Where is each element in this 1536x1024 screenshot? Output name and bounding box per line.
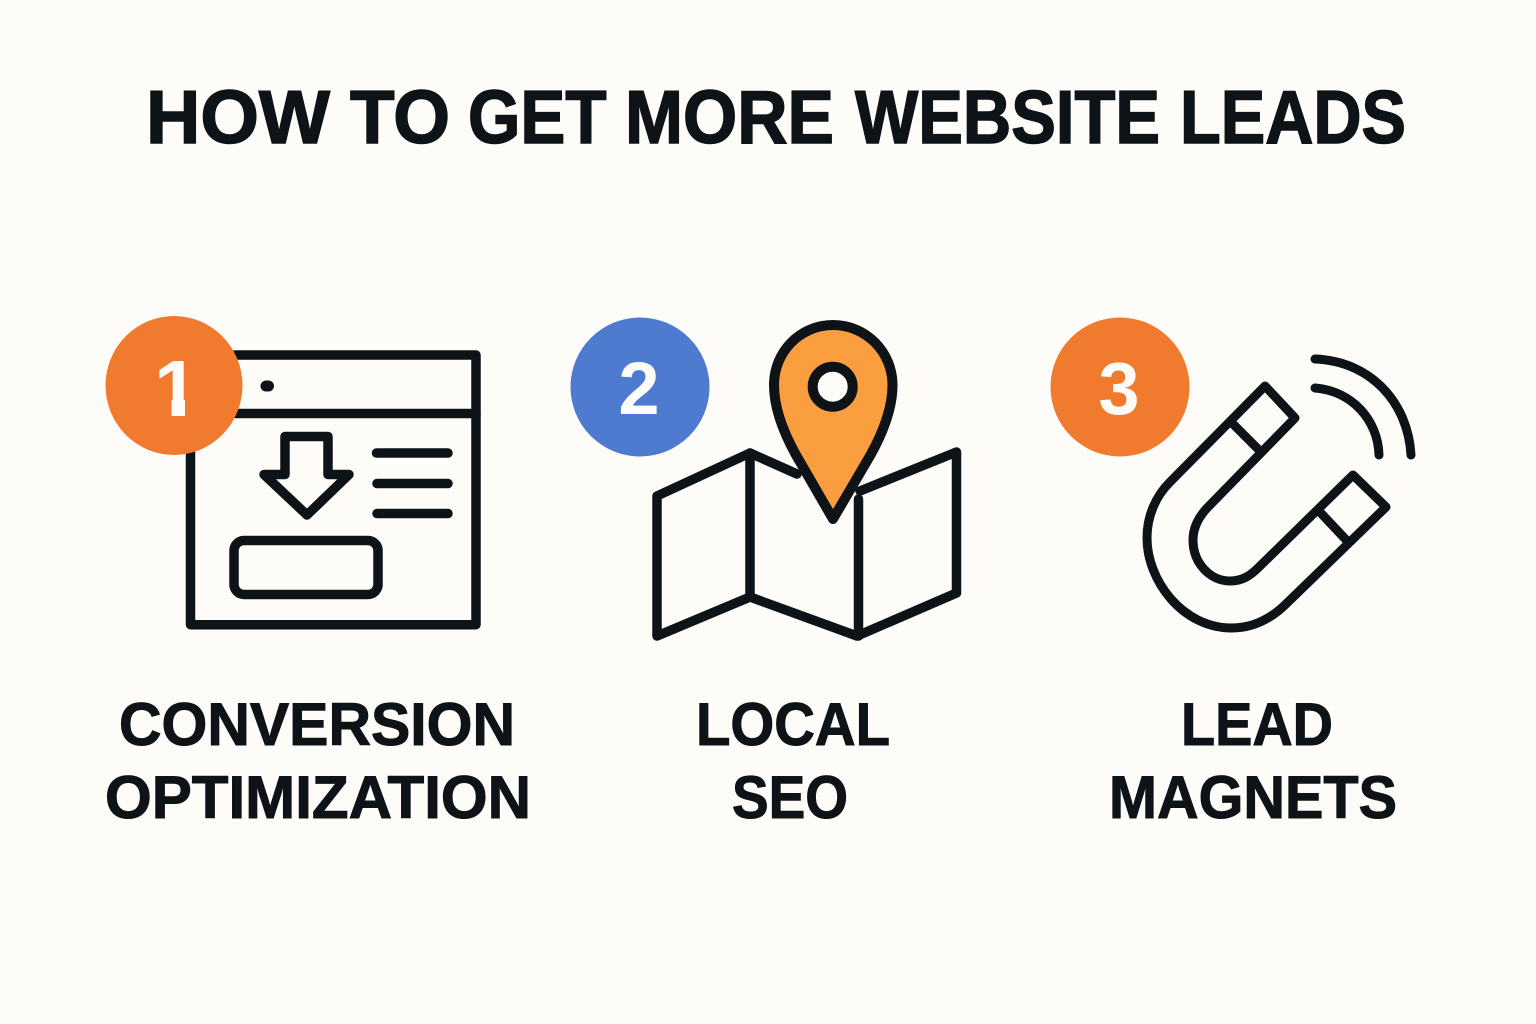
panel: lead magnets (1050, 318, 1411, 831)
label: local seo: LOCAL (696, 691, 890, 758)
label: lead magnets: MAGNETS (1109, 764, 1397, 831)
number badge 3: 3 (1098, 347, 1140, 430)
label: conversion optimization: OPTIMIZATION (105, 764, 531, 831)
label: lead magnets (1109, 691, 1397, 831)
label: lead magnets: LEAD (1181, 691, 1333, 758)
label: local seo (696, 691, 890, 831)
icon: browser window with form (190, 355, 476, 625)
number badge 1: 1 (154, 344, 198, 433)
icon: horseshoe magnet (1147, 359, 1411, 628)
title: LEADS (1180, 75, 1406, 159)
icon: folded map (657, 452, 956, 636)
title: WEBSITE (855, 75, 1160, 159)
number badge 1 (106, 316, 242, 455)
number badge 2 (570, 318, 710, 456)
number badge 2: 2 (618, 347, 660, 430)
title: HOW (146, 75, 330, 159)
label: local seo: SEO (732, 764, 848, 831)
icon: location pin (774, 325, 892, 519)
label: conversion optimization: CONVERSION (119, 691, 515, 758)
panel: local seo (570, 318, 956, 831)
label: conversion optimization (105, 691, 531, 831)
title (146, 75, 1406, 159)
title: MORE (625, 75, 834, 159)
title: GET (468, 75, 606, 159)
title: TO (350, 75, 450, 159)
number badge 3 (1050, 318, 1190, 456)
panel: conversion optimization (105, 316, 531, 831)
